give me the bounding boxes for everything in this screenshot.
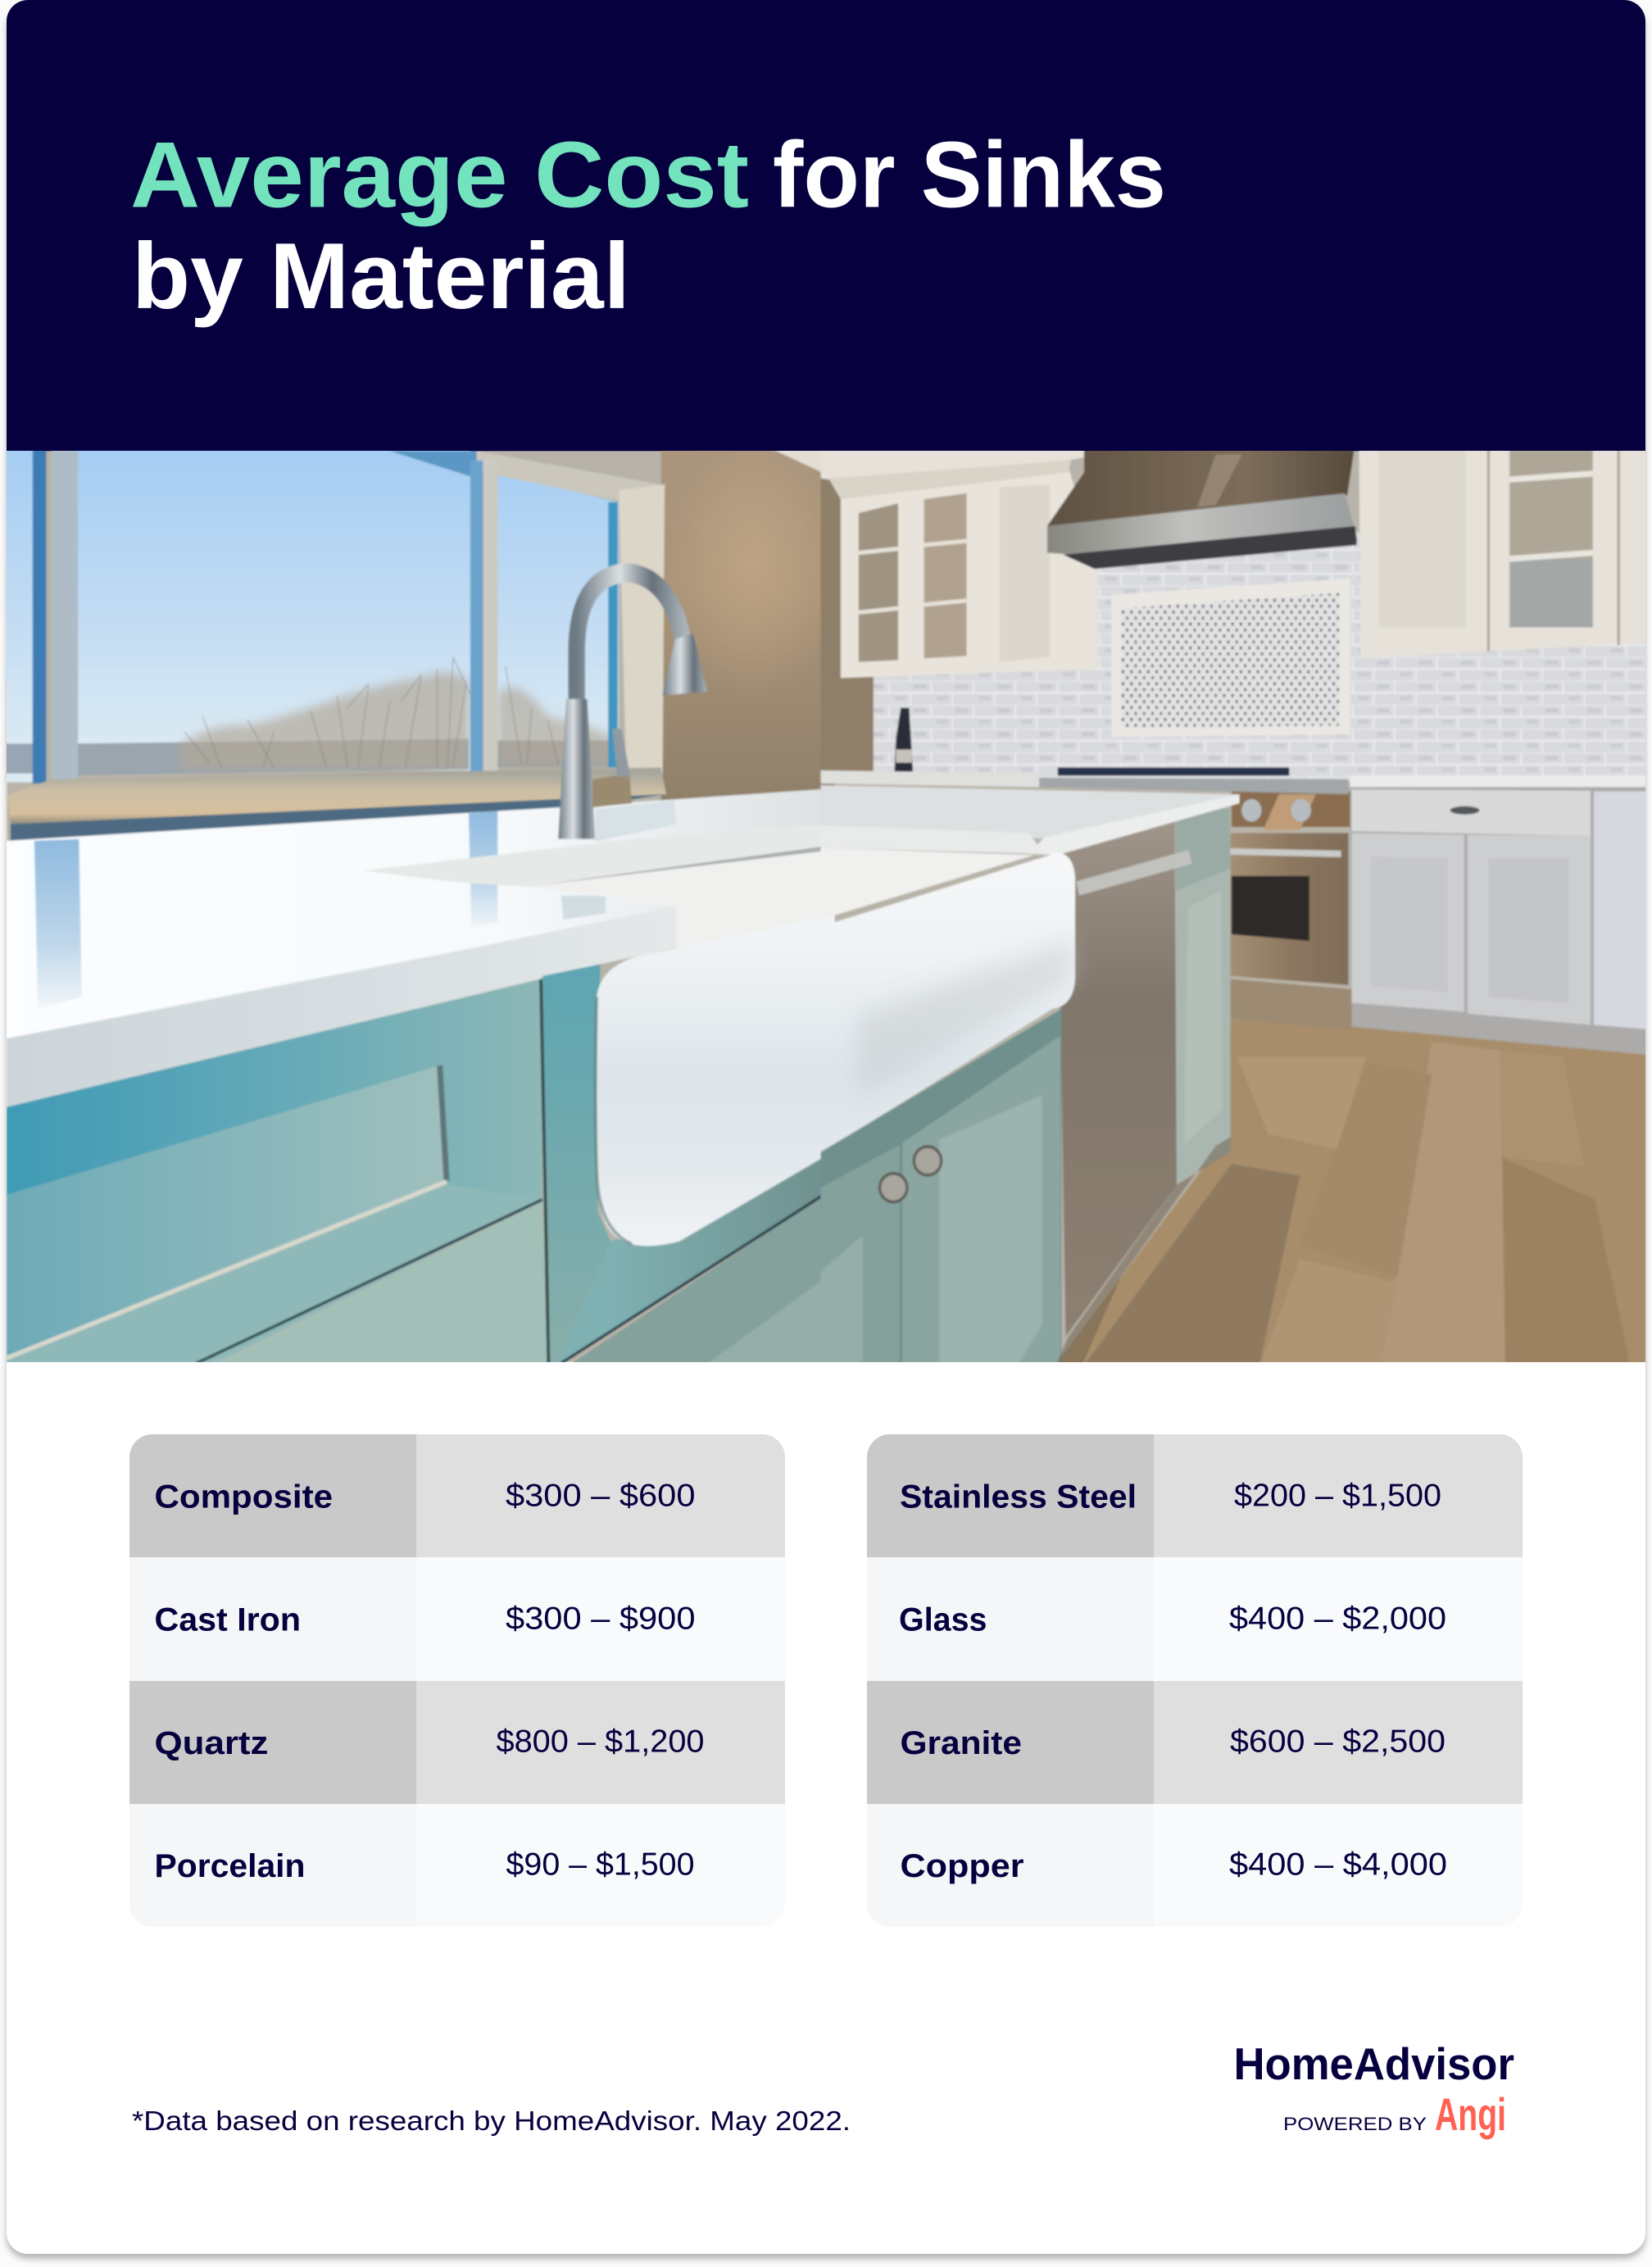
row: porcelain (129, 1804, 785, 1927)
photo: kitchen island with farmhouse sink (0, 425, 1652, 1373)
row: porcelain: $90 – $1,500 (506, 1847, 695, 1882)
reflection left (34, 839, 82, 1009)
horizon main (78, 738, 469, 775)
sink outline shadow (596, 997, 632, 1244)
feature panel frame (1111, 579, 1350, 737)
inset door (1000, 484, 1050, 662)
glass door 2 (924, 493, 967, 658)
plank dark 2 (1300, 1062, 1432, 1277)
sink front (597, 915, 835, 1246)
cabinet rail (7, 979, 542, 1373)
title: by Material (132, 225, 630, 329)
range knobs (1241, 799, 1311, 822)
knobs (880, 1147, 942, 1202)
countertop front edge (7, 906, 676, 1107)
top frame trim (477, 451, 666, 502)
range panel (1232, 791, 1350, 827)
range panel highlight (1263, 794, 1316, 830)
lower door (695, 1271, 835, 1373)
row: quartz: $800 – $1,200 (497, 1724, 705, 1759)
logo: HomeAdvisor powered by Angi: HomeAdvisor (1234, 2038, 1514, 2089)
ceiling (821, 443, 1152, 479)
hood top (1047, 443, 1355, 526)
drawer pull (1450, 806, 1480, 815)
oven door (1231, 833, 1349, 985)
island door 1 (821, 1145, 900, 1373)
inset shadow (440, 1065, 447, 1180)
mullion blue (470, 461, 483, 776)
logo: HomeAdvisor powered by Angi (1234, 2038, 1514, 2140)
range cooktop (1039, 778, 1349, 794)
plank light 4 (1258, 1259, 1397, 1373)
rim strip (821, 825, 1045, 854)
tree mass (179, 673, 469, 770)
row: copper (867, 1804, 1523, 1927)
glass door 1 (859, 503, 898, 662)
row: cast iron (129, 1557, 785, 1681)
countertop surface (7, 788, 835, 1038)
lower line (560, 1188, 835, 1364)
door 1 (1351, 833, 1464, 1012)
faucet body (558, 699, 595, 839)
row: composite: $300 – $600 (506, 1479, 695, 1513)
glass door interior (1509, 443, 1593, 627)
island base band (821, 1009, 1061, 1373)
title: for Sinks (773, 123, 1166, 228)
left upper cabinet block (841, 466, 1097, 678)
row: stainless steel: $200 – $1,500 (1234, 1479, 1441, 1513)
sky left pane (7, 451, 34, 784)
island door 2 panel (939, 1095, 1042, 1373)
photo left half: window, faucet, countertop, teal cabinets (0, 425, 842, 1373)
top frame (390, 451, 477, 479)
hood highlight (1197, 455, 1242, 507)
cabinet inset (1379, 443, 1466, 627)
oven window (1232, 876, 1309, 941)
wall (661, 443, 835, 812)
basin interior (527, 850, 835, 949)
row: granite: $600 – $2,500 (1230, 1724, 1446, 1759)
row: composite (129, 1434, 785, 1557)
drawer inset panel (7, 1065, 447, 1355)
back counter right (1350, 775, 1652, 789)
row: granite (867, 1681, 1523, 1804)
faucet handle base (592, 774, 632, 807)
basin (821, 848, 1034, 920)
back counter left (821, 770, 1039, 787)
small cabinet panel (1175, 807, 1231, 1183)
floor shadow behind island (1052, 1137, 1231, 1373)
door 3 (1594, 791, 1652, 1029)
sky right pane (497, 472, 619, 767)
row: glass: $400 – $2,000 (1229, 1601, 1446, 1636)
faucet spout end (662, 634, 707, 695)
plank light (1379, 1042, 1505, 1373)
strip below inset (7, 1184, 542, 1373)
row: stainless steel (867, 1434, 1523, 1557)
footnote: *Data based on research by HomeAdvisor. May 2022. (132, 2106, 851, 2136)
sill dark line (11, 794, 666, 841)
sink rim (363, 824, 835, 887)
island door 2 (902, 1036, 1060, 1373)
hood vent (1063, 526, 1357, 569)
row: cast iron: $300 – $900 (506, 1601, 695, 1636)
title: Average Cost (130, 123, 749, 228)
crown (828, 461, 1071, 499)
header band (7, 0, 1645, 452)
door 2 inset (1488, 859, 1568, 1003)
reflection right (595, 800, 677, 842)
logo: HomeAdvisor powered by Angi: Angi (1435, 2088, 1506, 2140)
plank dark 3 (1078, 1164, 1300, 1373)
price table: right column (867, 1434, 1523, 1927)
bottle (895, 708, 913, 771)
door 1 inset (1371, 856, 1447, 993)
reflection mullion (560, 896, 606, 920)
reflection mid (469, 811, 497, 929)
mullion gray (483, 459, 497, 778)
title (130, 123, 1166, 329)
lower drawer line (196, 1200, 542, 1364)
dishwasher handle (1078, 856, 1191, 888)
faucet lever (612, 729, 630, 776)
horizon right (497, 741, 616, 767)
logo: HomeAdvisor powered by Angi: POWERED BY (1283, 2114, 1427, 2134)
feature panel weave (1121, 593, 1340, 728)
photo right half: cabinets, hood, range, dishwasher, floor (821, 443, 1652, 1373)
row: granite: Granite (900, 1725, 1022, 1761)
stile dark line (541, 979, 549, 1373)
sky main pane (78, 443, 470, 770)
lower drawer (196, 1201, 547, 1373)
drawer (1351, 789, 1591, 836)
wall glow (701, 482, 805, 655)
plank light 2 (1500, 1051, 1584, 1167)
row: cast iron: Cast Iron (154, 1601, 301, 1638)
burners (1058, 767, 1290, 776)
sink front right (821, 852, 1075, 1153)
right pane blue (608, 502, 618, 767)
oven drawer (1231, 979, 1351, 1029)
right upper cabinets (1359, 443, 1652, 658)
band under sink (558, 1149, 835, 1364)
row: glass: Glass (899, 1601, 987, 1638)
floor (1050, 1020, 1652, 1373)
door 2 (1468, 835, 1591, 1025)
sill frame (8, 767, 666, 824)
window casing (619, 484, 665, 794)
shelves (1509, 474, 1593, 559)
kick (1353, 1004, 1652, 1056)
row: stainless steel: Stainless Steel (900, 1479, 1137, 1515)
plank dark 1 (1503, 1158, 1632, 1373)
dishwasher (1058, 821, 1177, 1337)
oven handle (1231, 852, 1341, 854)
wall (821, 472, 878, 783)
hood band (1047, 493, 1358, 556)
sink mottling (858, 938, 1073, 1098)
tree branches (184, 657, 584, 767)
ceiling (774, 451, 822, 472)
cabinet door line (1488, 443, 1618, 652)
lower cabinet bank (1350, 787, 1652, 1033)
small cabinet drawer (1175, 807, 1230, 891)
row: glass (867, 1557, 1523, 1681)
row: quartz (129, 1681, 785, 1804)
island counter top (821, 785, 1239, 839)
row: copper: Copper (900, 1848, 1024, 1884)
glass shelves (859, 541, 967, 612)
bottle label (896, 750, 912, 763)
rim shadow (527, 845, 835, 887)
small door inset (1184, 891, 1222, 1145)
island counter edge (1028, 794, 1239, 855)
left window frame gray (52, 443, 78, 789)
price table: left column (129, 1434, 785, 1927)
row: porcelain: Porcelain (154, 1848, 305, 1884)
island door 1 panel (821, 1235, 863, 1373)
tree mass right (497, 688, 616, 767)
row: composite: Composite (154, 1479, 333, 1515)
faucet neck (577, 573, 684, 729)
inset highlight (7, 1182, 447, 1358)
row: quartz: Quartz (154, 1725, 269, 1761)
lower cabinet right (558, 1188, 835, 1373)
glass lower (1509, 559, 1593, 627)
plank light 3 (1237, 1056, 1366, 1149)
cabinet stile (542, 964, 610, 1373)
backsplash (874, 532, 1652, 783)
row: copper: $400 – $4,000 (1229, 1847, 1447, 1882)
horizon left (7, 743, 34, 775)
left window frame (33, 443, 47, 784)
